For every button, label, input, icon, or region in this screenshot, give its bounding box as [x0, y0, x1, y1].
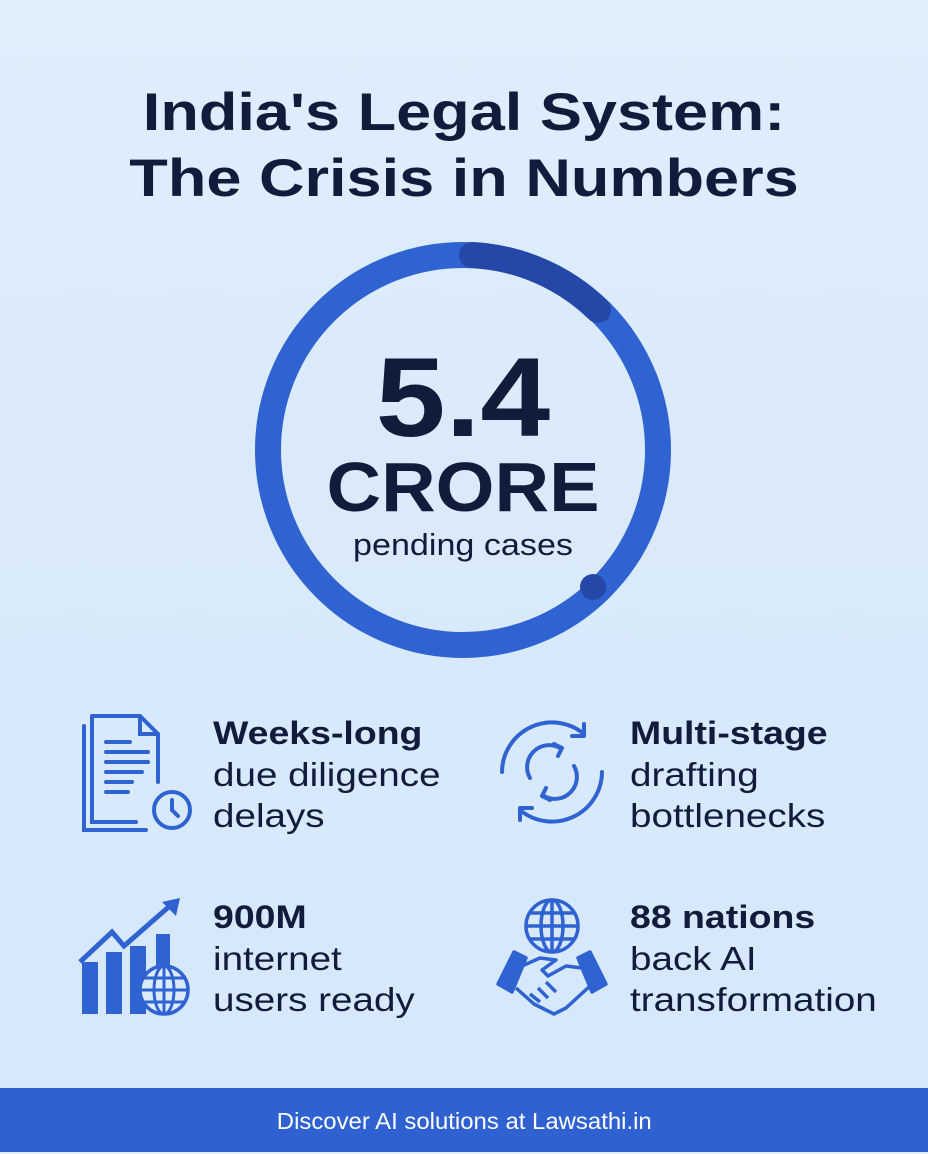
- ring stat: [255, 242, 671, 658]
- text: multi-stage: Multi-stage: [630, 715, 828, 751]
- text: weeks-long: [213, 715, 441, 834]
- text: 900M: [213, 899, 415, 1018]
- icon: globe with handshake: [496, 898, 608, 1016]
- text: 88 nations: transformation: [630, 981, 877, 1018]
- text: 88 nations: [630, 899, 877, 1018]
- text: weeks-long: due diligence: [213, 756, 441, 793]
- text: multi-stage: drafting: [630, 756, 759, 793]
- text: multi-stage: [630, 715, 828, 834]
- stat unit: CRORE: [326, 448, 600, 526]
- text: 900M: 900M: [213, 899, 307, 935]
- text: weeks-long: delays: [213, 797, 325, 834]
- text: 900M: internet: [213, 940, 342, 977]
- text: weeks-long: Weeks-long: [213, 715, 422, 751]
- text: multi-stage: bottlenecks: [630, 797, 825, 834]
- title: The Crisis in Numbers: [129, 149, 799, 208]
- text: 88 nations: back AI: [630, 940, 757, 977]
- footer: [0, 1088, 928, 1152]
- title: [129, 83, 799, 208]
- text: 900M: users ready: [213, 981, 415, 1018]
- icon: document with clock: [82, 714, 192, 832]
- title: India's Legal System:: [143, 83, 785, 142]
- text: 88 nations: 88 nations: [630, 899, 815, 935]
- icon: growth chart with globe: [78, 898, 190, 1016]
- stat label: pending cases: [353, 527, 573, 562]
- stat number: 5.4: [376, 335, 550, 460]
- icon: cycle arrows: [500, 720, 604, 824]
- footer: Discover AI solutions at Lawsathi.in: [277, 1108, 651, 1134]
